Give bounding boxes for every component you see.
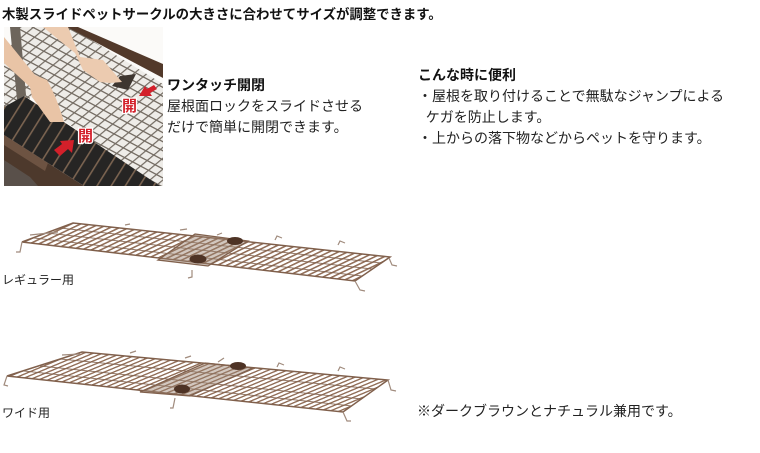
- text: convenience list: [418, 88, 724, 146]
- text: one-touch description: [167, 98, 363, 135]
- text: one-touch description: だけで簡単に開閉できます。: [167, 119, 348, 135]
- left frame post: [10, 27, 26, 100]
- photo: hands opening roof lock: [4, 27, 163, 186]
- sliding section: [158, 234, 248, 266]
- lock knobs: [227, 237, 243, 245]
- text: convenience list: ・屋根を取り付けることで無駄なジャンプによる: [418, 88, 724, 104]
- kanji open lower: 開: [78, 128, 93, 145]
- label: wide: ワイド用: [2, 406, 50, 420]
- feet and hooks: [16, 224, 397, 291]
- text: convenience list: ケガを防止します。: [426, 109, 550, 125]
- heading: one-touch open: ワンタッチ開閉: [167, 77, 265, 93]
- note: colours: ※ダークブラウンとナチュラル兼用です。: [417, 403, 682, 419]
- red arrow upper: [139, 85, 157, 96]
- kanji open upper: 開: [122, 98, 137, 115]
- top wooden frame: [67, 27, 163, 78]
- regular roof panel: [16, 223, 397, 291]
- label: regular: レギュラー用: [2, 273, 74, 287]
- left cage mesh: [4, 27, 30, 110]
- title: 木製スライドペットサークルの大きさに合わせてサイズが調整できます。: [2, 7, 442, 22]
- arm and hand right: [43, 27, 122, 83]
- front wooden frame: [4, 135, 84, 186]
- heading: convenient when: こんな時に便利: [418, 67, 516, 83]
- lock knobs: [230, 362, 246, 370]
- roof mesh panel: [20, 27, 163, 186]
- floor tray: [4, 96, 160, 186]
- sliding section: [140, 363, 253, 396]
- feet and hooks: [4, 351, 396, 421]
- lock handle: [112, 74, 136, 90]
- text: convenience list: ・上からの落下物などからペットを守ります。: [418, 130, 711, 146]
- red arrow lower: [54, 140, 74, 156]
- wide roof panel: [4, 351, 396, 421]
- arm and hand left: [4, 37, 64, 122]
- text: one-touch description: 屋根面ロックをスライドさせる: [167, 98, 363, 114]
